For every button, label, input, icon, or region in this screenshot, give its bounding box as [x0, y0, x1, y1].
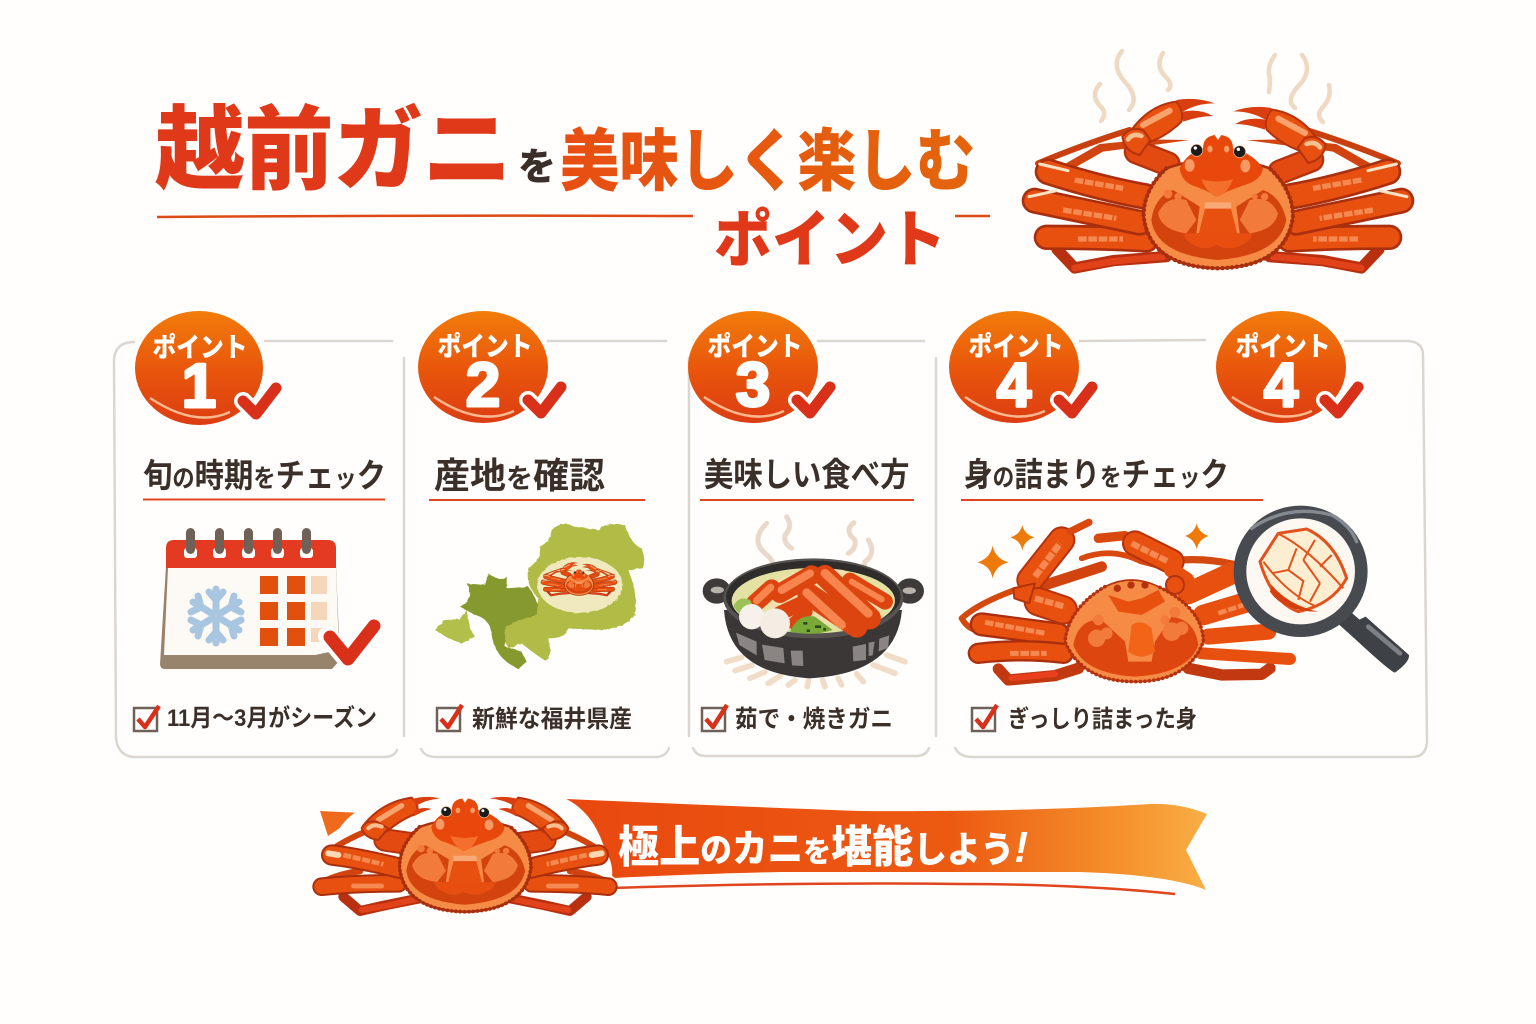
badge: ポイント3: ポイント — [708, 332, 802, 362]
icon: small crab on map — [542, 562, 616, 595]
badge: ポイント1: 1 — [182, 352, 216, 421]
icon: banner crab — [318, 792, 612, 915]
title underline — [157, 216, 990, 217]
icon: crab with sparkles — [962, 511, 1409, 682]
title: 越前ガニ: 越前ガニ — [155, 100, 512, 202]
left claw — [1013, 522, 1089, 610]
heading: 産地を確認: 産地を確認 — [434, 455, 605, 496]
bullet: 11月〜3月がシーズン: 11月〜3月がシーズン — [167, 704, 377, 732]
panel frames — [114, 340, 1427, 757]
heading underlines — [143, 498, 1263, 501]
badge: ポイント4 — [949, 311, 1092, 423]
badge: ポイント4: ポイント — [968, 332, 1064, 362]
badge: ポイント2 — [418, 311, 561, 423]
icon: steam over hero crab — [1095, 51, 1330, 122]
bullet: ぎっしり詰まった身: ぎっしり詰まった身 — [1008, 705, 1197, 733]
badge: ポイント4: 4 — [997, 351, 1032, 420]
heading: 美味しい食べ方: 美味しい食べ方 — [704, 456, 909, 493]
badge: ポイント4 duplicate: ポイント — [1236, 332, 1330, 362]
icon: calendar with snowflake — [160, 528, 374, 669]
crab carapace — [1065, 580, 1203, 682]
icon: hero crab — [1029, 99, 1407, 268]
heading: 旬の時期をチェック: 旬の時期をチェック — [143, 457, 386, 494]
badge: ポイント4 duplicate: 4 — [1264, 351, 1299, 420]
crab legs in pot — [755, 575, 885, 627]
badge: ポイント1: ポイント — [152, 333, 248, 363]
icon: steam — [758, 517, 872, 575]
badge: ポイント3 — [688, 311, 830, 423]
right claw — [1082, 536, 1187, 594]
bullet: 新鮮な福井県産: 新鮮な福井県産 — [472, 706, 632, 733]
badge: ポイント4 duplicate — [1216, 311, 1358, 423]
icon: Fukui map with crab — [435, 524, 644, 669]
banner ribbon — [320, 799, 1207, 894]
heading: 身の詰まりをチェック: 身の詰まりをチェック — [964, 456, 1229, 493]
crab legs — [962, 560, 1290, 680]
badge: ポイント3: 3 — [736, 351, 770, 420]
burner rays — [727, 655, 905, 687]
title: 美味しく楽しむ: 美味しく楽しむ — [560, 124, 975, 200]
banner text: 極上のカニを堪能しよう! — [618, 823, 1028, 872]
sparkles — [978, 523, 1209, 578]
badge: ポイント1 — [135, 311, 276, 425]
badge: ポイント2: 2 — [466, 351, 500, 420]
badge: ポイント2: ポイント — [438, 332, 532, 362]
icon: magnifying glass — [1240, 511, 1409, 673]
title: を: を — [518, 147, 556, 189]
icon: hot pot with crab legs — [703, 517, 924, 687]
title — [155, 100, 990, 275]
bullet: 茹で・焼きガニ: 茹で・焼きガニ — [735, 706, 893, 733]
icon: snowflake — [191, 589, 241, 643]
title: ポイント: ポイント — [714, 206, 946, 275]
